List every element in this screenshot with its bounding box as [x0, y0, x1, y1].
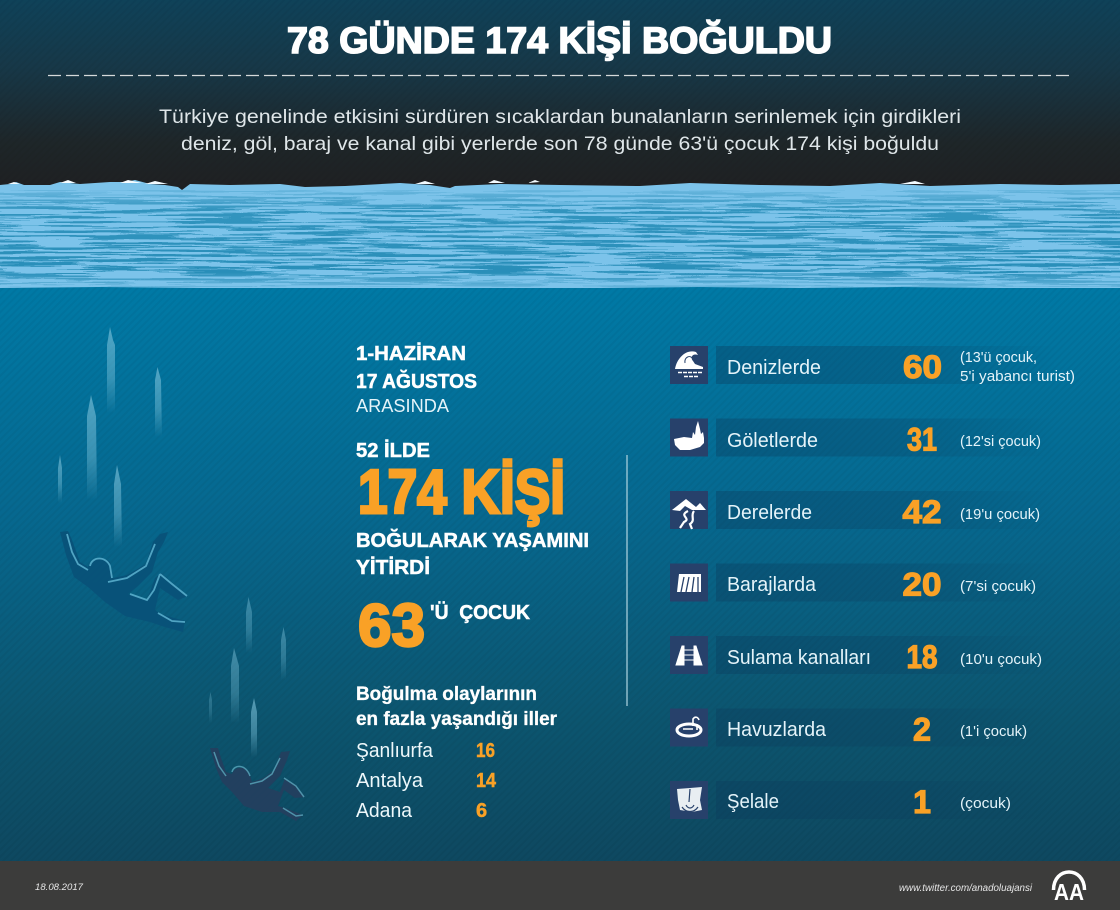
stat: 63 children — [358, 592, 531, 659]
row: Derelerde: (19'u çocuk) — [960, 507, 1040, 523]
date range text: 1-HAZİRAN — [356, 342, 466, 365]
row: Havuzlarda — [670, 708, 1056, 748]
title: 78 GÜNDE 174 KİŞİ BOĞULDU — [287, 20, 832, 61]
main stat: 174 people in 52 provinces: YİTİRDİ — [356, 556, 430, 579]
footer: date: 18.08.2017 — [35, 882, 84, 893]
top provinces list: 16 — [476, 740, 495, 762]
dark sky header background — [0, 0, 1120, 190]
row: Denizlerde: (13'ü çocuk, — [960, 350, 1037, 366]
intro text: Türkiye genelinde etkisini sürdüren sıcaklardan bunalanların serinlemek için girdikleri — [159, 106, 961, 128]
row: Denizlerde: 5'i yabancı turist) — [960, 369, 1075, 385]
icon: wave — [675, 351, 703, 376]
row: Havuzlarda: (1'i çocuk) — [960, 724, 1027, 740]
main stat: 174 people in 52 provinces — [356, 439, 589, 579]
row: Denizlerde — [670, 346, 1075, 385]
row: Göletlerde: 31 — [907, 422, 937, 458]
figure: small sinking person with bubbles — [209, 597, 305, 821]
top provinces list: 6 — [476, 800, 487, 822]
row: Sulama kanalları — [670, 636, 1056, 675]
row: Sulama kanalları: 18 — [906, 639, 938, 675]
top provinces list: Boğulma olaylarının — [356, 684, 537, 705]
top provinces list: 14 — [476, 770, 497, 792]
row: Barajlarda — [670, 564, 1056, 602]
vertical divider — [626, 455, 628, 706]
icon: dam — [677, 574, 701, 592]
water surface — [0, 180, 1120, 288]
stat: 63 children: 63 — [358, 592, 425, 659]
logo: AA: AA — [1054, 879, 1084, 905]
row: Barajlarda: 20 — [902, 566, 942, 602]
date range text: ARASINDA — [356, 396, 449, 416]
row: Şelale: Şelale — [727, 791, 779, 813]
row: Denizlerde: Denizlerde — [727, 357, 821, 379]
row: Barajlarda: (7'si çocuk) — [960, 579, 1036, 595]
row: Şelale: (çocuk) — [960, 796, 1011, 812]
icon: pond with trees — [674, 421, 704, 450]
icon: waterfall — [677, 787, 702, 812]
underwater background — [0, 280, 1120, 865]
date range text: 17 AĞUSTOS — [356, 369, 477, 393]
stat: 63 children: 'Ü ÇOCUK — [430, 601, 531, 624]
top provinces list: en fazla yaşandığı iller — [356, 709, 558, 730]
row: Derelerde: 42 — [902, 494, 942, 530]
row: Göletlerde — [670, 418, 1056, 458]
footer: twitter address: www.twitter.com/anadoluajansi — [899, 883, 1033, 894]
row: Havuzlarda: Havuzlarda — [727, 719, 827, 741]
row: Derelerde: Derelerde — [727, 502, 812, 524]
top provinces list: Antalya — [356, 770, 424, 792]
row: Göletlerde: (12'si çocuk) — [960, 434, 1041, 450]
main stat: 174 people in 52 provinces: BOĞULARAK YAŞAMINI — [356, 528, 589, 552]
footer bar — [0, 861, 1120, 910]
intro text — [159, 106, 961, 155]
row: Derelerde — [670, 491, 1056, 530]
row: Barajlarda: Barajlarda — [727, 574, 817, 596]
row: Şelale — [670, 781, 1056, 820]
row: Göletlerde: Göletlerde — [727, 430, 818, 452]
icon: pool — [677, 717, 701, 736]
main stat: 174 people in 52 provinces: 174 KİŞİ — [358, 458, 565, 527]
figure: large sinking person with bubbles — [58, 327, 188, 632]
top provinces list: Şanlıurfa — [356, 740, 434, 762]
row: Havuzlarda: 2 — [913, 712, 931, 748]
date range text — [356, 342, 477, 416]
icon: mountain stream — [672, 499, 706, 529]
top provinces list — [356, 684, 558, 822]
top provinces list: Adana — [356, 800, 413, 822]
dashed divider — [48, 74, 1072, 76]
row: Sulama kanalları: Sulama kanalları — [727, 647, 871, 669]
main stat: 174 people in 52 provinces: 52 İLDE — [356, 439, 430, 462]
intro text: deniz, göl, baraj ve kanal gibi yerlerde son 78 günde 63'ü çocuk 174 kişi boğuldu — [181, 133, 939, 155]
row: Denizlerde: 60 — [903, 349, 942, 385]
row: Şelale: 1 — [913, 784, 931, 820]
row: Sulama kanalları: (10'u çocuk) — [960, 652, 1042, 668]
icon: canal — [676, 646, 702, 665]
